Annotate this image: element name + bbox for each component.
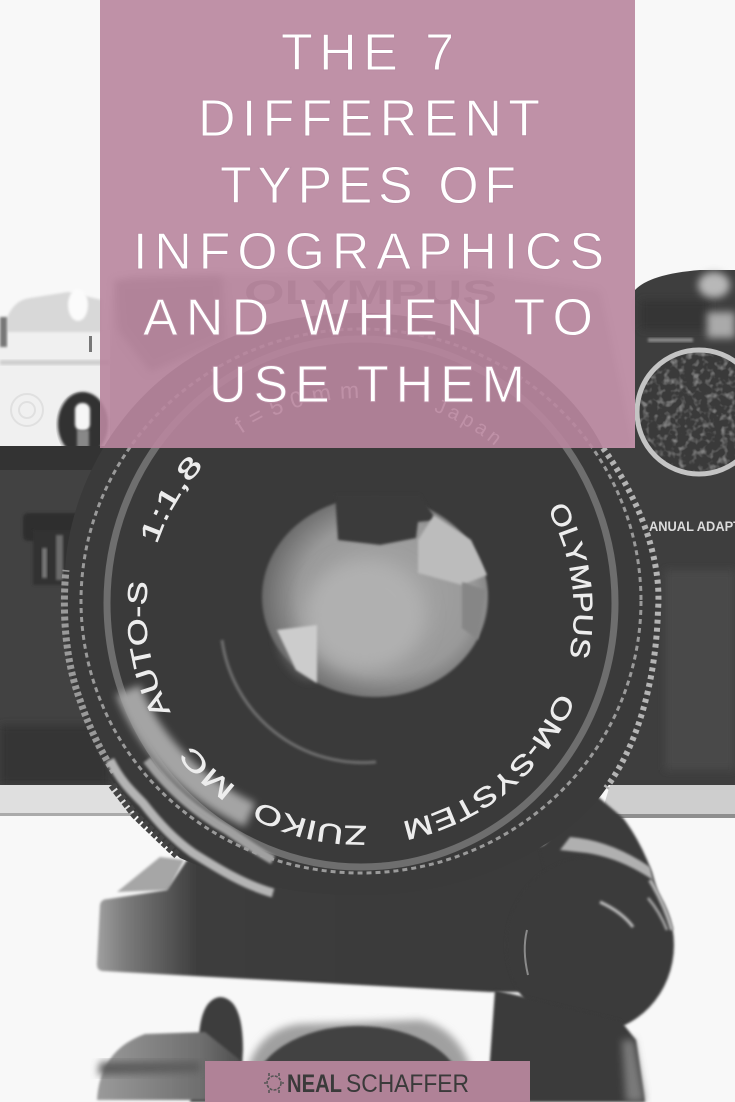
lens inner element ring xyxy=(222,640,376,763)
engraving: ZUIKO: ZUIKO xyxy=(255,804,366,845)
footer background xyxy=(205,1061,530,1102)
camera prism housing: OLYMPUS xyxy=(244,274,497,312)
silver top plate, left xyxy=(0,289,110,448)
tripod lower hump xyxy=(242,1020,478,1102)
camera photograph xyxy=(0,268,735,1102)
knob: edge highlights xyxy=(650,880,672,930)
title line 6: USE THEM xyxy=(209,356,525,414)
tripod thumb screw xyxy=(190,997,243,1102)
engraving: AUTO-S: AUTO-S xyxy=(128,582,171,712)
tripod mount xyxy=(97,790,674,1102)
camera body, right xyxy=(590,270,735,785)
title panel xyxy=(100,0,635,448)
tripod left lobe xyxy=(97,1032,246,1100)
glass: central reflection xyxy=(305,560,425,670)
tripod shoulder wedge xyxy=(117,857,184,892)
brand name xyxy=(287,1070,469,1098)
lens outer barrel xyxy=(63,313,660,895)
camera body, left xyxy=(0,446,140,785)
engraving: OLYMPUS: OLYMPUS xyxy=(551,504,593,658)
glass: upper right reflection xyxy=(418,515,487,585)
engraving: OM-SYSTEM: OM-SYSTEM xyxy=(404,696,572,840)
glass: right shadow facet xyxy=(462,582,486,640)
lens engraved text xyxy=(128,386,593,845)
lens knurled grip, right xyxy=(603,448,658,788)
camera lens xyxy=(60,313,662,898)
engraving: Japan: Japan xyxy=(435,400,500,445)
lens lit text band xyxy=(128,690,250,815)
lens silver band, lower left xyxy=(110,760,273,893)
engraving: 1:1,8: 1:1,8 xyxy=(142,457,200,542)
footer brand panel xyxy=(205,1061,530,1102)
tripod knob xyxy=(506,790,674,1033)
silver strip, lower body xyxy=(0,785,735,818)
lens knurled teeth on white xyxy=(112,785,178,856)
title text xyxy=(133,24,604,414)
title line 2: DIFFERENT xyxy=(198,90,540,148)
title panel background xyxy=(100,0,635,448)
lens glass highlight xyxy=(262,494,488,697)
title line 4: INFOGRAPHICS xyxy=(133,223,604,281)
glass: dark notch xyxy=(335,494,436,545)
lens speckled ring xyxy=(81,329,641,873)
engraving: MC: MC xyxy=(181,748,234,800)
title line 5: AND WHEN TO xyxy=(143,289,593,347)
shutter knob, left xyxy=(56,392,108,458)
knob: upper crescent highlight xyxy=(560,837,653,880)
title line 3: TYPES OF xyxy=(220,157,516,215)
lens knurled grip, left xyxy=(64,570,114,772)
tripod plate xyxy=(97,845,560,992)
lens lit rim, lower left xyxy=(147,760,273,860)
camera prism housing xyxy=(100,272,634,448)
textured dial, right xyxy=(636,350,735,474)
title line 1: THE 7 xyxy=(281,24,454,82)
icon: Neal Schaffer logo xyxy=(264,1073,284,1093)
glass: lower left reflection xyxy=(277,625,317,683)
engraving: f=50mm: f=50mm xyxy=(235,386,358,432)
tripod lower column xyxy=(487,990,645,1102)
lens metal rim xyxy=(107,339,615,867)
brand: NEAL: NEAL xyxy=(287,1070,342,1098)
brand: SCHAFFER: SCHAFFER xyxy=(346,1070,469,1098)
